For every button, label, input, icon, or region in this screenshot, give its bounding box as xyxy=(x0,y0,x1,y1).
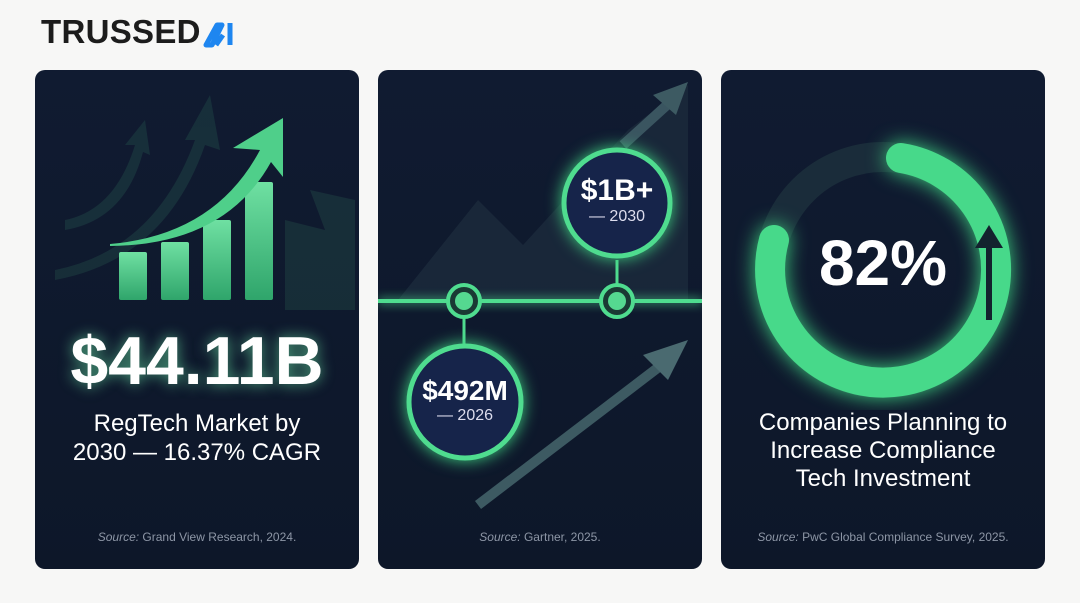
callout: $492M 2026: $492M xyxy=(422,375,508,406)
panel: market size xyxy=(35,70,359,569)
callout: $1B+ 2030: — 2030 xyxy=(589,208,645,225)
text: description: Increase Compliance xyxy=(770,437,996,464)
callout: $492M 2026: — 2026 xyxy=(437,407,493,424)
stat: $44.11B: $44.11B xyxy=(70,323,324,399)
background mountain and arrows xyxy=(398,85,688,300)
timeline line xyxy=(378,299,702,303)
source: Source: Gartner, 2025. xyxy=(479,530,601,544)
text: description: RegTech Market by xyxy=(94,410,300,437)
source: Source: PwC Global Compliance Survey, 2025. xyxy=(757,530,1009,544)
source: Source: Grand View Research, 2024. xyxy=(98,530,296,544)
text: description: 2030 — 16.37% CAGR xyxy=(73,439,321,466)
chart: progress ring xyxy=(740,128,1026,410)
panel: timeline xyxy=(378,70,702,569)
text: description: Companies Planning to xyxy=(759,409,1007,436)
callout: $1B+ 2030: $1B+ xyxy=(581,174,653,207)
text: description: Tech Investment xyxy=(796,465,970,492)
chart: growth bars with arrow xyxy=(55,96,355,310)
logo: TRUSSED xyxy=(41,13,201,50)
callout: $492M 2026 xyxy=(422,375,508,424)
panel: 82% xyxy=(721,70,1045,569)
icon: AI mark xyxy=(204,22,232,48)
stat: 82%: 82% xyxy=(819,227,947,299)
text: description xyxy=(759,409,1007,492)
text: description xyxy=(73,410,321,466)
callout: $1B+ 2030 xyxy=(581,174,653,225)
